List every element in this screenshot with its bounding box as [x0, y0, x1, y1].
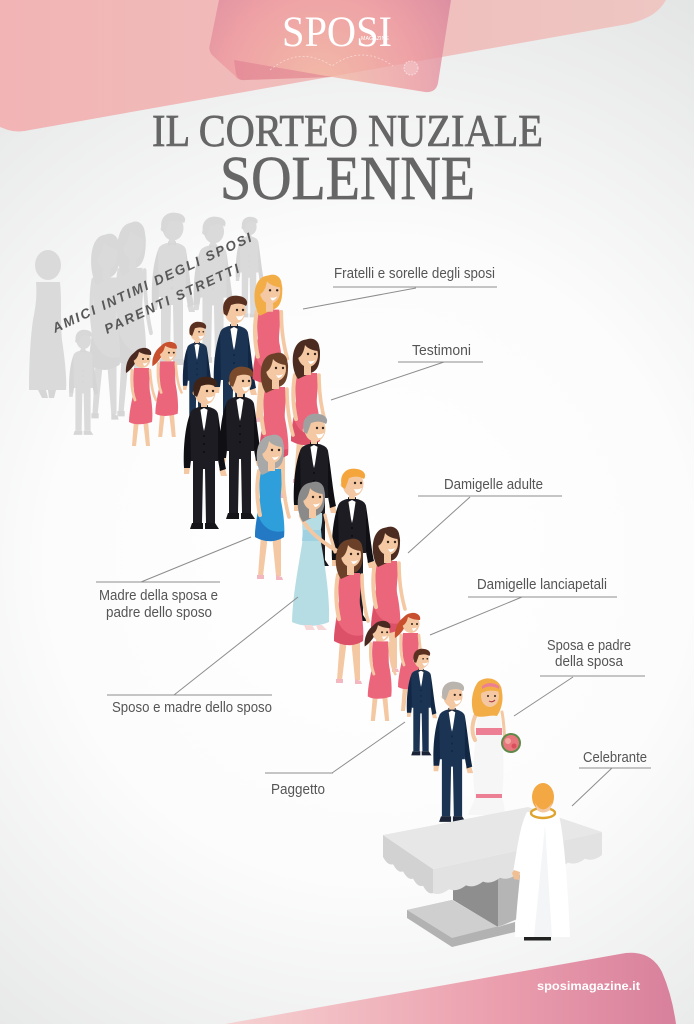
grey silhouettes: guests	[29, 213, 264, 435]
silhouette: man	[194, 217, 235, 363]
label: sposo e madre dello sposo	[107, 597, 298, 716]
figure: navy boy	[183, 322, 213, 428]
figure: flower girl 1	[126, 348, 156, 446]
title: IL CORTEO NUZIALE	[152, 105, 543, 156]
label: sposa e padre della sposa: della sposa	[555, 653, 624, 670]
label: fratelli e sorelle degli sposi	[303, 265, 497, 309]
label: damigelle adulte: Damigelle adulte	[444, 476, 543, 493]
figure: page boy	[407, 649, 437, 755]
figure: bridesmaid brown hair	[259, 353, 293, 498]
figure: man in tuxedo	[184, 377, 227, 529]
label: sposa e padre della sposa	[514, 637, 645, 716]
figure: bridesmaid right	[291, 339, 325, 484]
figure: father of the groom	[294, 414, 337, 566]
label: sposo e madre dello sposo: Sposo e madre dello sposo	[112, 699, 272, 716]
caption: parenti stretti: PARENTI STRETTI	[102, 261, 242, 337]
label: paggetto: Paggetto	[271, 781, 325, 798]
label: celebrante: Celebrante	[583, 749, 647, 766]
top pink banner	[0, 0, 666, 132]
caption: amici intimi degli sposi: AMICI INTIMI DEGLI SPOSI	[49, 230, 254, 336]
bottom pink banner	[225, 953, 676, 1024]
label: testimoni	[331, 342, 483, 400]
website: sposimagazine.it	[537, 979, 640, 993]
label: testimoni: Testimoni	[412, 342, 471, 359]
label: madre della sposa e padre dello sposo	[96, 537, 251, 621]
figure: mother of the groom in aqua gown	[292, 482, 337, 630]
label: fratelli e sorelle degli sposi: Fratelli e sorelle degli sposi	[334, 265, 495, 282]
figure: blonde sister	[253, 275, 287, 423]
figure: bridesmaid front	[334, 539, 368, 684]
figure: bridesmaid right lower	[371, 527, 405, 672]
title	[152, 105, 543, 213]
label: madre della sposa e padre dello sposo: Madre della sposa e	[99, 587, 218, 604]
figure: flower girl 3	[365, 621, 395, 721]
label: damigelle lanciapetali	[430, 576, 617, 635]
silhouette: child	[69, 330, 99, 435]
logo	[270, 9, 418, 75]
label: sposa e padre della sposa: Sposa e padre	[547, 637, 631, 654]
procession figures	[126, 275, 521, 822]
silhouette: woman	[115, 222, 151, 418]
silhouette: woman with ponytail	[89, 234, 125, 420]
label: celebrante	[572, 749, 651, 806]
logo: MAGAZINE	[361, 36, 389, 42]
silhouette: man	[236, 217, 264, 317]
title: SOLENNE	[220, 145, 475, 213]
silhouette: tall man	[152, 213, 195, 365]
logo: SPOSI	[282, 9, 392, 56]
figure: bride	[468, 678, 506, 815]
figure: flower girl 4	[395, 613, 425, 711]
icon: bouquet	[501, 733, 521, 753]
figure: father of the bride	[433, 682, 473, 822]
label: damigelle lanciapetali: Damigelle lanciapetali	[477, 576, 607, 593]
figure: flower girl 2	[152, 342, 182, 437]
figure: mother of the bride	[255, 435, 289, 580]
figure: bearded man	[220, 367, 263, 519]
altar	[383, 807, 602, 947]
label: damigelle adulte	[408, 476, 562, 553]
label: madre della sposa e padre dello sposo: padre dello sposo	[106, 604, 212, 621]
label: paggetto	[265, 722, 405, 798]
silhouette: long gown woman	[29, 250, 66, 398]
figure: blond groom	[332, 469, 375, 621]
figure: celebrant	[512, 783, 570, 940]
figure: navy brother	[214, 296, 257, 448]
